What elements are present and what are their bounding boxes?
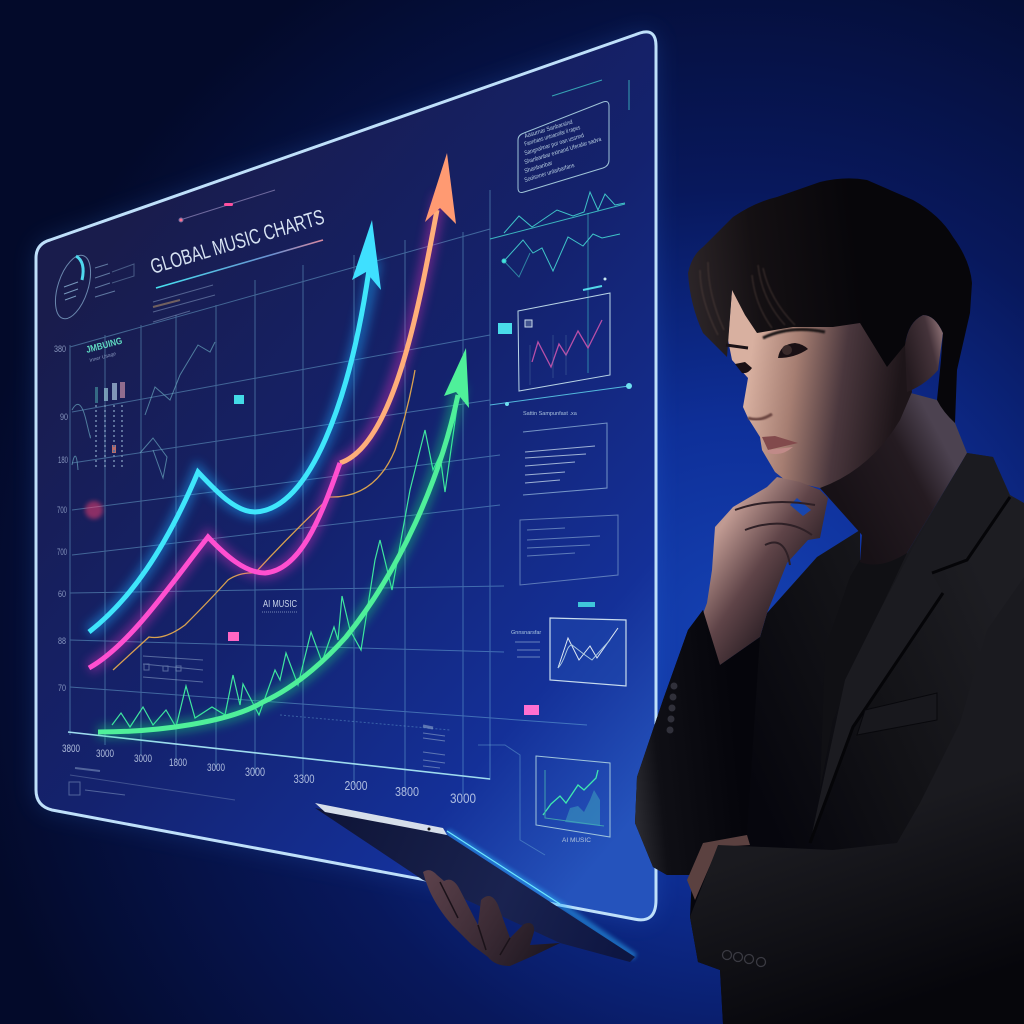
x axis [68, 732, 490, 779]
finger lines [735, 502, 815, 565]
forearm [690, 577, 1024, 1024]
ear [905, 315, 943, 392]
y axis labels: 380 [54, 344, 66, 354]
x axis labels: 3800 [62, 743, 80, 755]
marker row above title [179, 190, 275, 222]
widget: top-right text box: Shanbanbar extnand Uferafar sadva [524, 137, 603, 166]
arrow: green [444, 348, 469, 408]
chart grid [70, 190, 587, 795]
y axis labels: 700 [57, 505, 67, 515]
t-shirt [820, 553, 907, 790]
widget: top-right text box: Fannhass untnannfar il rapes [524, 125, 581, 148]
cyan curve glow [89, 260, 375, 632]
y axis labels [54, 344, 68, 693]
neck [820, 392, 967, 565]
x axis labels: 3000 [450, 790, 476, 806]
blue gap [790, 498, 811, 516]
caption rules [515, 642, 540, 657]
glow dot [85, 501, 103, 519]
arrow: orange [425, 153, 456, 224]
x axis labels: 3000 [96, 748, 114, 760]
hand holding tablet [423, 870, 560, 966]
x axis labels: 2000 [344, 778, 368, 793]
lips [762, 436, 798, 454]
title underline [156, 240, 323, 288]
widget: top-right lines [490, 80, 629, 373]
pink tag lower [524, 705, 539, 715]
dashed lines right [280, 715, 450, 730]
orange curve top [340, 210, 437, 463]
y axis labels: 70 [58, 683, 66, 693]
tablet [315, 803, 635, 966]
jacket pocket [857, 693, 937, 735]
widget: top-right text box [518, 102, 609, 192]
panel: holographic screen [36, 32, 656, 920]
AI music label: AI MUSIC [263, 598, 297, 610]
AI music underline [262, 611, 297, 613]
text panel heading: Sattin Sampunfast .xa [523, 411, 578, 417]
cyan curve [89, 270, 369, 632]
cyan tag above [578, 602, 595, 607]
y axis labels: 700 [57, 547, 67, 557]
legend block [143, 656, 203, 682]
section sublabel: Inner Usage [89, 351, 117, 364]
widget: top-right text box: Sangnahnar pur oan ussnnd [524, 133, 585, 157]
pink tag [228, 632, 239, 641]
cyan tag right [498, 323, 512, 334]
y axis labels: 88 [58, 636, 66, 646]
hand at chin [692, 477, 828, 665]
small text column [423, 726, 445, 768]
mini bars [95, 382, 125, 470]
widget: white line chart [550, 618, 626, 686]
widget: top-right text box: Aasurnar Sanbarsind [524, 120, 573, 140]
long line with node [490, 383, 632, 406]
widget: top-right text box: Shanbanbar [524, 161, 553, 175]
jacket: body [635, 453, 1024, 1024]
y axis labels: 60 [58, 589, 66, 599]
pink curve glow [89, 195, 440, 668]
widget: top-right text box: Soolsnner unfarbarfans [524, 163, 575, 184]
green spark line [112, 400, 458, 727]
section label: green heading: JMBUING [85, 336, 124, 356]
sleeve buttons [666, 682, 678, 734]
faint line charts left [72, 342, 215, 478]
widget: green mini chart [536, 756, 610, 837]
nose shadow [748, 414, 772, 419]
sub chart orange line [113, 370, 415, 670]
cuff buttons [722, 950, 766, 966]
eyebrow and eyes [726, 330, 825, 373]
x axis labels: 3800 [395, 784, 419, 799]
face [728, 290, 912, 488]
title: GLOBAL MUSIC CHARTS [148, 206, 327, 279]
chart caption: Gnnsnarsfar [511, 630, 541, 636]
person [635, 178, 1024, 1024]
connector lines [478, 745, 545, 855]
widget: blue text panel [520, 515, 618, 585]
small text under title [153, 285, 215, 322]
cyan marker [234, 395, 244, 404]
x axis labels [62, 743, 476, 806]
pink curve [89, 463, 340, 668]
green curve [98, 395, 458, 732]
lower hand [687, 835, 750, 900]
hair [688, 178, 972, 423]
mini chart caption: AI MUSIC [562, 837, 591, 844]
green curve glow [98, 385, 460, 732]
x axis labels: 3000 [134, 753, 152, 765]
lapel shadow [810, 497, 1010, 843]
jacket lapel [810, 453, 1010, 843]
x axis labels: 1800 [169, 757, 187, 769]
y axis labels: 90 [60, 412, 68, 422]
widget: pink line chart [518, 293, 610, 391]
hair strands [700, 262, 795, 335]
y axis labels: 180 [58, 455, 68, 465]
arrow: cyan [352, 220, 381, 290]
neon curves [89, 195, 460, 732]
x axis labels: 3000 [245, 765, 265, 779]
footer block [69, 768, 235, 800]
x axis labels: 3300 [294, 772, 315, 786]
widget: text panel [523, 423, 607, 495]
dashboard widget: radial gauge [49, 251, 134, 323]
raised sleeve [635, 610, 760, 875]
x axis labels: 3000 [207, 762, 225, 774]
